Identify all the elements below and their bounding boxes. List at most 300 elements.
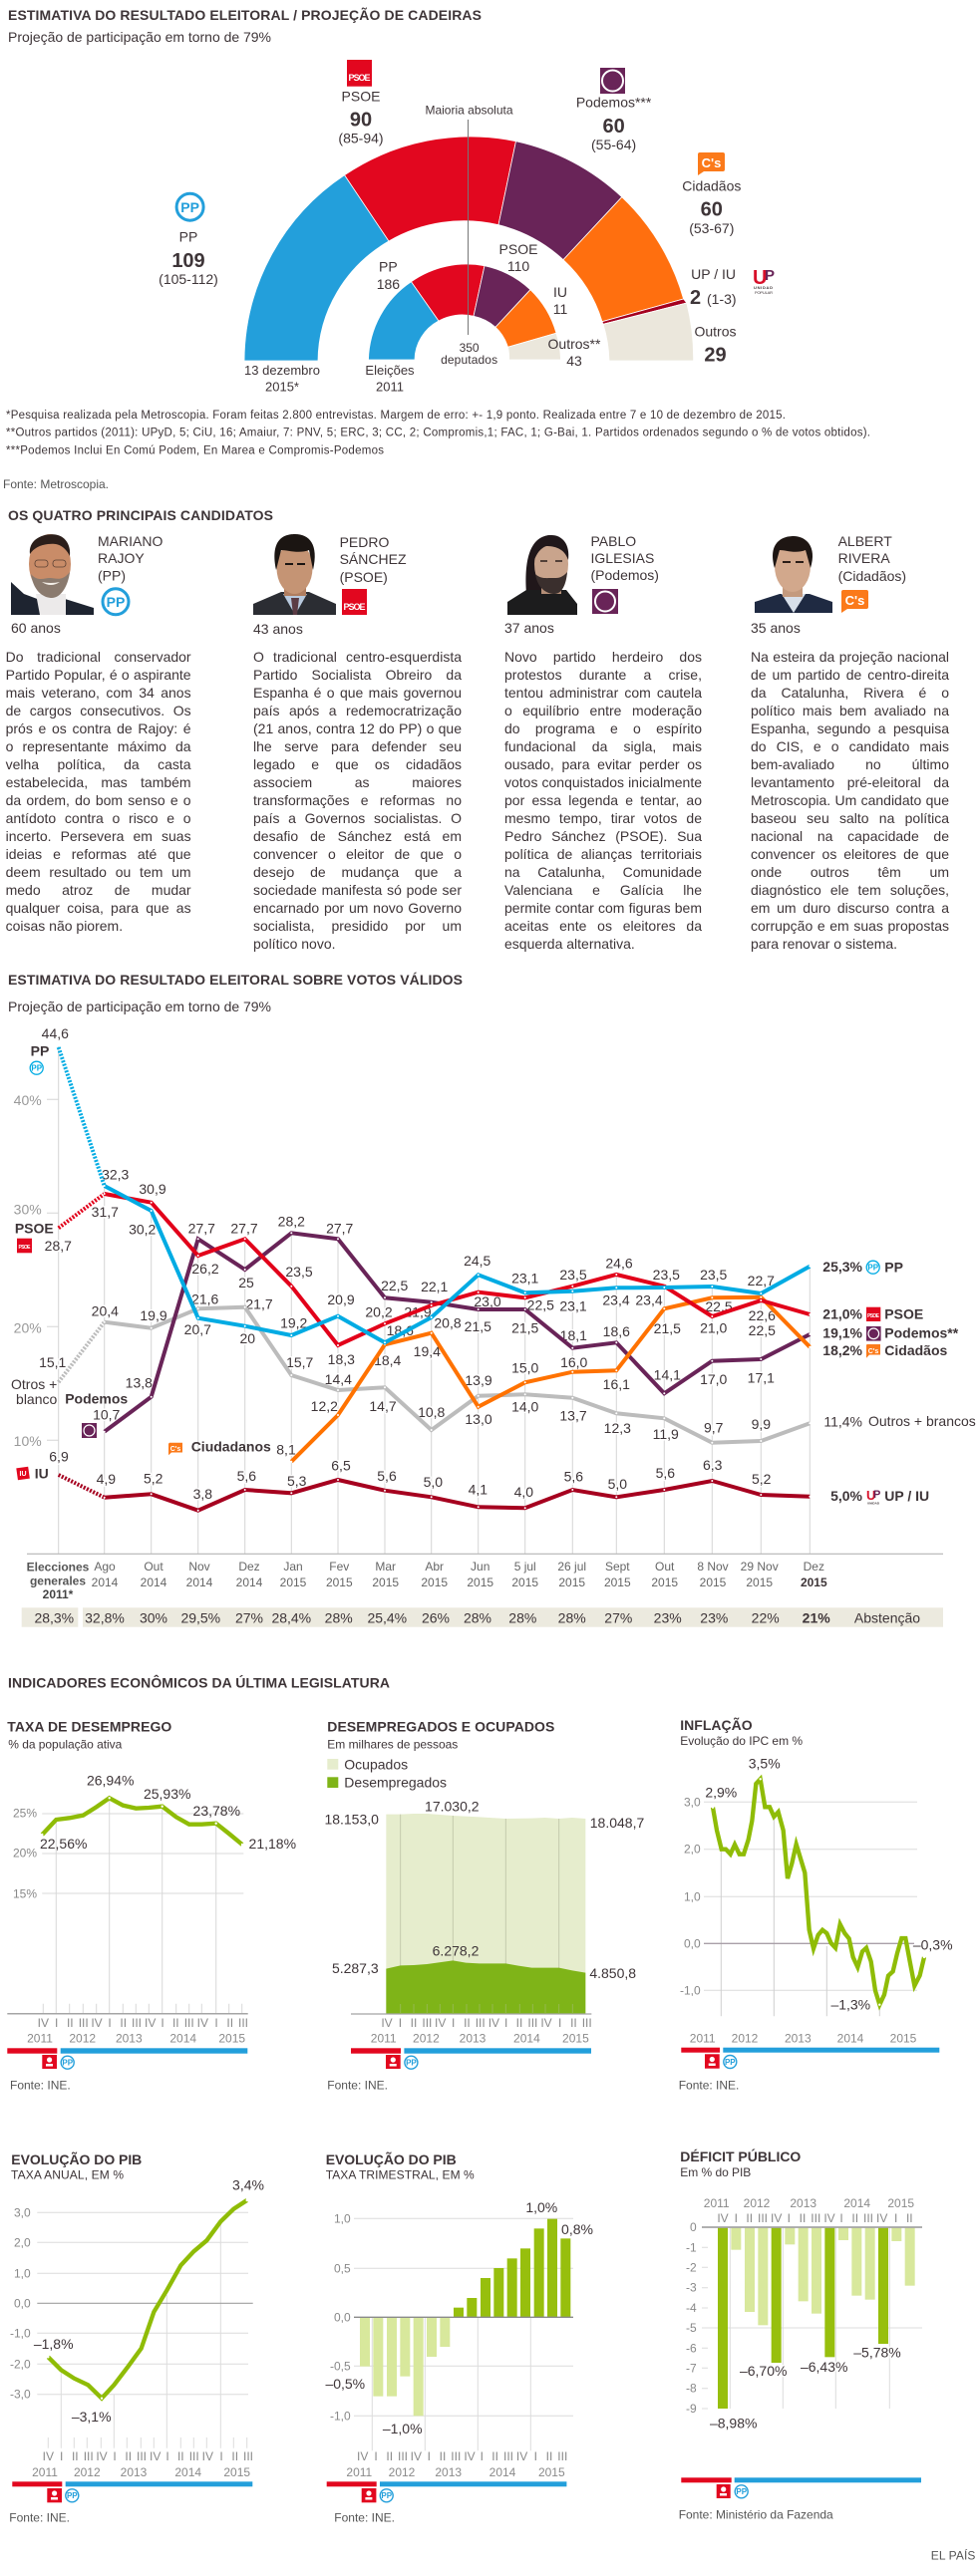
series label: PP left: PP — [31, 1042, 49, 1058]
data value labels: 16,1 — [603, 1376, 630, 1392]
y axis labels: 40% — [14, 1092, 42, 1108]
series label: PP left: PP — [31, 1064, 43, 1072]
x axis quarters and years: III — [84, 2449, 94, 2463]
data value labels: 9,7 — [704, 1419, 724, 1435]
y axis labels — [14, 1092, 42, 1449]
text block: Sánchez biography: O tradicional centro-esquerdista — [253, 649, 462, 665]
x axis quarters and years: IV — [411, 2449, 422, 2463]
x axis quarters and years: III — [527, 2016, 537, 2030]
icon: Ciudadanos logo — [841, 590, 868, 613]
footnotes: **Outros partidos (2011): UPyD, 5; CiU, 16; Amaiur, 7: PNV, 5; ERC, 3; CC, 2; Compromis,1; FAC, 1; G-Bai, 1. Partidos ordenados segundo o % de votos obtidos). — [6, 428, 870, 439]
text block: Rajoy biography: medo atroz de mudar — [6, 882, 191, 898]
y axis labels: 0,0 — [334, 2310, 351, 2324]
x axis labels: Dez — [804, 1560, 824, 1574]
label: UP / IU 2015 — [690, 266, 775, 309]
series label: UP / IU right: P — [873, 1489, 880, 1501]
data value labels: 27,7 — [188, 1220, 215, 1236]
label: Podemos 2015: 60 — [602, 116, 625, 138]
x axis labels — [27, 1560, 827, 1601]
data value labels: 5,2 — [752, 1471, 772, 1487]
y axis labels: -1,0 — [330, 2409, 351, 2423]
series label: IU left: IU — [20, 1471, 26, 1478]
series label: Outros + brancos right — [823, 1413, 976, 1430]
x axis quarters and years: I — [374, 2449, 378, 2463]
data value labels: 3,8 — [193, 1486, 212, 1502]
data value labels: 12,3 — [604, 1420, 631, 1436]
icon: PSOE logo: PSOE — [343, 602, 365, 612]
point markers — [712, 1778, 925, 2006]
data value labels: 28,7 — [45, 1238, 72, 1254]
text block: Rajoy biography: mais veterano, com 34 anos — [6, 685, 191, 701]
line: unemployment — [42, 1798, 242, 1845]
labels: 2011 seat counts: 350 — [460, 341, 480, 355]
data value labels: 21,5 — [511, 1320, 539, 1336]
value labels — [325, 2199, 593, 2436]
data value labels: 19,9 — [140, 1307, 167, 1323]
data value labels: 5,3 — [287, 1473, 307, 1489]
y axis labels: 25% — [13, 1806, 37, 1820]
x axis quarters and years: 2015 — [538, 2465, 565, 2479]
data value labels: 4,9 — [97, 1471, 116, 1487]
icon: Podemos logo — [592, 589, 618, 614]
chart grid — [37, 2212, 253, 2448]
data value labels: 13,9 — [465, 1372, 492, 1388]
x axis quarters and years: I — [214, 2016, 218, 2030]
data value labels: 19,4 — [414, 1343, 441, 1359]
name: Iglesias: PABLO — [590, 533, 636, 549]
value labels: 17.030,2 — [425, 1799, 480, 1815]
labels: 2011 seat counts: Outros** — [548, 336, 601, 352]
x axis quarters and years: I — [60, 2449, 63, 2463]
text block: Rajoy biography — [6, 649, 191, 934]
label: PSOE 2015: PSOE — [342, 89, 380, 105]
abstention row — [22, 1607, 943, 1627]
x axis quarters and years — [27, 2016, 248, 2045]
text block: Iglesias biography: o equilíbrio entre moderação — [504, 703, 702, 718]
x axis labels: 2015 — [801, 1575, 827, 1589]
series label: Cidadãos right: Cidadãos — [884, 1342, 948, 1358]
subtitle: Em milhares de pessoas — [327, 1738, 458, 1752]
panel: annual GDP — [9, 2150, 264, 2525]
x axis labels: 2014 — [236, 1575, 263, 1589]
x axis quarters and years: IV — [43, 2449, 54, 2463]
data value labels: 5,6 — [237, 1468, 256, 1484]
x axis quarters and years: III — [503, 2449, 513, 2463]
data value labels: 6,9 — [49, 1449, 69, 1465]
x axis quarters and years — [346, 2449, 567, 2479]
data value labels: 27,7 — [326, 1220, 354, 1236]
data value labels: 22,5 — [527, 1296, 554, 1312]
data value labels: 16,0 — [560, 1354, 588, 1370]
x axis quarters and years: III — [451, 2449, 461, 2463]
y axis labels: -1,0 — [10, 2326, 31, 2340]
y axis labels: 2,0 — [14, 2235, 31, 2249]
series label: UP / IU right — [830, 1488, 929, 1505]
x axis quarters and years: I — [161, 2016, 164, 2030]
x axis quarters and years: I — [399, 2016, 402, 2030]
x axis quarters and years: 2012 — [413, 2031, 440, 2045]
heading: unemployed and employed: DESEMPREGADOS E OCUPADOS — [327, 1718, 554, 1734]
age: Sánchez: 43 anos — [253, 621, 303, 637]
series label: PSOE left — [15, 1221, 54, 1253]
x axis quarters and years: III — [137, 2449, 147, 2463]
government bars: PP — [67, 2491, 78, 2500]
data value labels: 14,4 — [325, 1371, 352, 1387]
data value labels: 22,5 — [749, 1322, 776, 1338]
abstention row: Abstenção — [854, 1609, 920, 1625]
series label: Otros + blanco: blanco — [16, 1391, 58, 1407]
name: Sánchez: (PSOE) — [340, 569, 388, 585]
text block: Sánchez biography: sociedade manifesta só pode ser — [253, 882, 462, 898]
x axis labels: Mar — [375, 1560, 396, 1574]
x axis quarters and years: I — [481, 2449, 484, 2463]
data value labels: 18,3 — [328, 1351, 355, 1367]
series label: Cidadãos right: C's — [868, 1348, 878, 1355]
value labels: –1,8% — [34, 2336, 74, 2352]
text block: Sánchez biography: Espanha é o que mais governou — [253, 685, 462, 701]
x axis labels: 2015 — [467, 1575, 493, 1589]
source: Fonte: Ministério da Fazenda — [679, 2508, 833, 2522]
x axis labels: 2015 — [604, 1575, 631, 1589]
value labels: 0,8% — [561, 2221, 593, 2237]
text block: Sánchez biography: associem as maiores — [253, 774, 462, 790]
data value labels: 18,6 — [603, 1323, 630, 1339]
panel: inflation — [679, 1716, 953, 2093]
value labels: –1,3% — [830, 1997, 870, 2013]
series label: Podemos right: 19,1% — [822, 1325, 863, 1341]
x axis labels: 2015 — [326, 1575, 353, 1589]
text block: Rajoy biography: Partido Popular, é o aspirante — [6, 667, 191, 683]
series label: Ciudadanos left: Ciudadanos — [191, 1439, 271, 1455]
series label: Ciudadanos left: C's — [170, 1446, 180, 1453]
data value labels: 30,2 — [129, 1221, 157, 1237]
y axis labels: 3,0 — [14, 2205, 31, 2219]
text block: Sánchez biography: encarnado por um novo Governo — [253, 900, 462, 916]
text block: Iglesias biography: Novo partido herdeiro dos — [504, 649, 702, 665]
x axis quarters and years: II — [746, 2211, 753, 2225]
text block: Sánchez biography: lhe serve para defender seu — [253, 738, 462, 754]
x axis quarters and years: IV — [717, 2211, 729, 2225]
data value labels: 23,5 — [559, 1267, 587, 1283]
text block: Sánchez biography: convencer o eleitor de que o — [253, 846, 462, 862]
value labels: –5,78% — [853, 2345, 901, 2361]
name: Iglesias: IGLESIAS — [590, 550, 654, 566]
x axis labels: 2015 — [280, 1575, 307, 1589]
x axis quarters and years: III — [758, 2211, 768, 2225]
footnotes: *Pesquisa realizada pela Metroscopia. Foram feitas 2.800 entrevistas. Margem de erro: +- 1,9 ponto. Realizada entre 7 e 10 de dezembro de 2015. — [6, 410, 786, 422]
panel: vote estimate line chart — [8, 972, 976, 1627]
name: Sánchez — [340, 534, 407, 585]
x axis quarters and years: 2011 — [346, 2465, 373, 2479]
x axis quarters and years: 2014 — [489, 2465, 516, 2479]
series label: Podemos left: Podemos — [65, 1391, 128, 1407]
x axis quarters and years: 2012 — [744, 2196, 771, 2210]
data value labels: 27,7 — [230, 1220, 258, 1236]
data value labels: 21,5 — [654, 1320, 681, 1336]
value labels: 6.278,2 — [433, 1943, 480, 1959]
x axis quarters and years: IV — [357, 2449, 368, 2463]
legend: Desempregados — [344, 1775, 447, 1791]
point markers — [41, 1797, 243, 1846]
icon: Unidad Popular logo: P — [765, 267, 775, 284]
data value labels: 21,7 — [245, 1295, 273, 1311]
area chart — [351, 1814, 591, 2014]
text block: Rajoy biography: incerto. Persevera em suas — [6, 828, 191, 844]
data value labels: 23,4 — [602, 1291, 630, 1307]
x axis quarters and years: II — [800, 2211, 806, 2225]
abstention row: 32,8% — [85, 1609, 125, 1625]
text block: Rivera biography: bem-avaliado no último — [751, 756, 949, 772]
x axis quarters and years: I — [788, 2211, 791, 2225]
text block: Rajoy biography: de cargos consecutivos. Os — [6, 703, 191, 718]
abstention row: 28% — [558, 1609, 586, 1625]
text block: Rajoy biography: estabelecida, mas também — [6, 774, 191, 790]
chart: inner hemicycle 2011 elections — [369, 264, 560, 360]
text block: Rajoy biography: qualquer coisa, para que as — [6, 900, 191, 916]
data value labels: 6,5 — [331, 1458, 351, 1474]
label: PP 2015: 109 — [171, 250, 205, 272]
data value labels: 28,2 — [278, 1213, 305, 1229]
text block: Rajoy biography: coisas não piorem. — [6, 918, 123, 934]
y axis labels: 1,0 — [334, 2211, 351, 2225]
x axis years: 2015 — [890, 2031, 917, 2045]
y axis labels and grid: -2 — [686, 2260, 697, 2274]
series label: Podemos left — [65, 1391, 128, 1438]
labels: 2011 seat counts: PSOE — [499, 241, 537, 257]
value labels — [34, 2177, 264, 2425]
label: PP 2015: PP — [179, 229, 197, 245]
text block: Iglesias biography: ousado, para evitar perder os — [504, 756, 702, 772]
x axis labels: Abr — [425, 1560, 444, 1574]
x axis labels: Out — [144, 1560, 163, 1574]
text block: Iglesias biography: tentou administrar com cautela — [504, 685, 702, 701]
line: inflation — [713, 1779, 924, 2005]
panel: quarterly GDP — [325, 2150, 593, 2525]
series label: Otros + blanco: Otros + — [11, 1376, 57, 1392]
value labels: 2,9% — [705, 1785, 737, 1801]
labels: 2011 seat counts: 2015* — [265, 380, 299, 395]
value labels: 22,56% — [40, 1836, 87, 1852]
value labels: 18.153,0 — [324, 1812, 379, 1828]
label: UP / IU 2015: (1-3) — [707, 291, 737, 307]
text block: Iglesias biography: fundacional da sigla, mais — [504, 738, 702, 754]
data value labels: 10,7 — [93, 1406, 121, 1422]
source: Fonte: INE. — [10, 2079, 71, 2093]
data value labels: 23,5 — [285, 1264, 313, 1280]
label: Cidadãos 2015: Cidadãos — [682, 178, 741, 194]
line: PP — [59, 1047, 810, 1342]
label: PP 2015 — [159, 193, 218, 287]
x axis quarters and years: II — [231, 2449, 238, 2463]
series label: Otros + blanco — [11, 1376, 58, 1407]
x axis quarters and years: 2013 — [121, 2465, 148, 2479]
x axis quarters and years: II — [386, 2449, 393, 2463]
x axis quarters and years: I — [839, 2211, 843, 2225]
heading: public deficit: DÉFICIT PÚBLICO — [680, 2147, 801, 2164]
series label: Cidadãos right: 18,2% — [822, 1342, 863, 1358]
label: PP 2015: (105-112) — [159, 271, 218, 287]
panel: public deficit — [679, 2147, 922, 2522]
x axis quarters and years: II — [67, 2016, 74, 2030]
x axis quarters and years: IV — [202, 2449, 213, 2463]
x axis labels: Jun — [471, 1560, 489, 1574]
icon: PP logo: PP — [107, 594, 125, 610]
x axis quarters and years: II — [411, 2016, 417, 2030]
x axis quarters and years: III — [422, 2016, 432, 2030]
x axis quarters and years: IV — [823, 2211, 835, 2225]
x axis labels: 5 jul — [514, 1560, 536, 1574]
text block: Rivera biography: Espanha, segundo a pesquisa — [751, 720, 949, 736]
value labels: 5.287,3 — [332, 1960, 379, 1976]
government bars — [351, 2048, 591, 2069]
subtitle: turnout projection: Projeção de participação em torno de 79% — [8, 29, 271, 45]
series label: Podemos right: Podemos** — [884, 1325, 959, 1341]
text block: Sánchez biography — [253, 649, 463, 952]
name: Rivera: (Cidadãos) — [838, 568, 906, 584]
text block: Iglesias biography: Valenciana e Galícia lhe — [504, 882, 702, 898]
data value labels: 21,9 — [404, 1303, 432, 1319]
x axis labels: 2015 — [511, 1575, 538, 1589]
text block: Rajoy biography: ideias e reformas até que — [6, 846, 191, 862]
text block: Iglesias biography: por essa legenda e tentar, ao — [504, 792, 702, 808]
panel: unemployed and employed — [324, 1718, 644, 2093]
x axis labels: Sept — [605, 1560, 630, 1574]
portrait: Rivera — [755, 536, 832, 613]
government bars — [12, 2481, 252, 2502]
x axis labels: Fev — [329, 1560, 349, 1574]
x axis labels: 2015 — [651, 1575, 678, 1589]
x axis quarters and years: III — [184, 2016, 194, 2030]
x axis quarters and years: III — [398, 2449, 408, 2463]
name: Iglesias — [590, 533, 659, 583]
text block: Sánchez biography: transformações e reformas no — [253, 792, 462, 808]
government bars: PP — [736, 2487, 748, 2496]
x axis labels: 2011* — [43, 1587, 74, 1601]
data value labels: 23,1 — [559, 1297, 587, 1313]
series label: PP right: PP — [884, 1260, 903, 1276]
text block: Rajoy biography: antídoto contra o risco e o — [6, 810, 191, 826]
data value labels: 21,6 — [191, 1290, 219, 1306]
data value labels: 10,8 — [418, 1404, 446, 1420]
icon: Unidad Popular logo — [753, 267, 775, 295]
bar chart: quarterly GDP — [354, 2219, 573, 2416]
series label: PSOE right — [822, 1305, 923, 1322]
icon: PSOE logo — [342, 589, 367, 615]
heading: annual GDP: EVOLUÇÃO DO PIB — [11, 2150, 142, 2167]
text block: Iglesias biography — [504, 649, 702, 952]
labels: 2011 seat counts: IU — [553, 284, 567, 300]
x axis quarters and years: I — [504, 2016, 507, 2030]
x axis labels: Elecciones — [27, 1561, 90, 1574]
panel: seat projection — [3, 6, 870, 491]
y axis labels and grid: -7 — [686, 2361, 697, 2375]
text block: Rivera biography: do CIS, e o candidato mais — [751, 738, 949, 754]
x axis quarters and years: II — [851, 2211, 858, 2225]
source: Fonte: INE. — [327, 2079, 388, 2093]
x axis years: 2014 — [837, 2031, 864, 2045]
text block: Sánchez biography: socialista, presidido por um — [253, 918, 462, 934]
abstention row: 21% — [803, 1609, 830, 1625]
series label: PP right: 25,3% — [822, 1259, 863, 1275]
data value labels: 20,4 — [92, 1302, 119, 1318]
x axis quarters and years: 2011 — [27, 2031, 53, 2045]
series label: Podemos right — [822, 1325, 959, 1341]
series label: Outros + brancos right: 11,4% — [823, 1414, 862, 1430]
text block: Rajoy biography: o representante máximo da — [6, 738, 191, 754]
x axis labels: 2015 — [372, 1575, 399, 1589]
majority line — [467, 120, 469, 335]
data value labels: 9,9 — [752, 1416, 771, 1432]
age: Rivera: 35 anos — [751, 620, 801, 636]
data value labels: 5,0 — [424, 1474, 443, 1490]
data value labels: 20,9 — [327, 1291, 355, 1307]
abstention row: 28% — [464, 1609, 491, 1625]
label: Outros 2015 — [694, 324, 737, 367]
data value labels: 13,8 — [126, 1375, 153, 1391]
x axis quarters and years: III — [189, 2449, 199, 2463]
data value labels: 25 — [238, 1275, 254, 1290]
government bars: PP — [62, 2059, 74, 2067]
x axis quarters and years: I — [452, 2016, 455, 2030]
abstention row: 30% — [140, 1609, 167, 1625]
x axis labels: 2014 — [141, 1575, 167, 1589]
x axis quarters and years: 2013 — [435, 2465, 462, 2479]
labels: 2011 seat counts: 110 — [507, 258, 529, 274]
data value labels: 5,6 — [656, 1465, 675, 1481]
label: Outros 2015: 29 — [704, 345, 727, 367]
subtitle: TAXA ANUAL, EM % — [11, 2168, 124, 2182]
data value labels: 4,1 — [469, 1481, 488, 1497]
x axis quarters and years: II — [72, 2449, 79, 2463]
data value labels: 17,0 — [700, 1371, 728, 1387]
x axis quarters and years: I — [108, 2016, 112, 2030]
text block: Sánchez biography: político novo. — [253, 936, 335, 952]
abstention row: 28% — [508, 1609, 536, 1625]
credit: El País: EL PAÍS — [931, 2547, 975, 2562]
series label: PP right: PP — [867, 1264, 879, 1272]
data value labels: 5,6 — [377, 1468, 397, 1484]
portrait: Iglesias — [507, 535, 577, 615]
x axis quarters and years: I — [558, 2016, 561, 2030]
value labels: –8,98% — [710, 2416, 757, 2432]
chart grid — [27, 1046, 943, 1554]
value labels — [324, 1799, 644, 1981]
line: Outros + brancos — [59, 1307, 810, 1443]
abstention row: 28,4% — [271, 1609, 311, 1625]
value labels — [40, 1773, 296, 1852]
data value labels: 44,6 — [42, 1025, 69, 1041]
chart grid — [704, 1802, 917, 2016]
value labels: 25,93% — [144, 1786, 190, 1802]
data value labels: 21,0 — [700, 1319, 728, 1335]
series label: PSOE right: PSOE — [867, 1313, 880, 1319]
x axis quarters and years: I — [534, 2449, 537, 2463]
x axis quarters and years: I — [113, 2449, 117, 2463]
text block: Rivera biography: para renovar o sistema. — [751, 936, 897, 952]
data value labels: 4,0 — [514, 1484, 533, 1500]
abstention row: 28,3% — [34, 1609, 74, 1625]
label: Cidadãos 2015: (53-67) — [689, 220, 734, 236]
x axis labels: Jan — [283, 1560, 303, 1574]
source: Fonte: INE. — [334, 2511, 395, 2525]
abstention row: 28% — [325, 1609, 353, 1625]
government bars: PP — [725, 2058, 736, 2067]
data value labels: 15,0 — [511, 1359, 539, 1375]
line: IU — [59, 1475, 810, 1511]
icon: Unidad Popular logo: POPULAR — [755, 290, 773, 295]
text block: Rajoy biography: da ordem, do bom senso e o — [6, 792, 191, 808]
series label: PP right — [822, 1259, 903, 1276]
